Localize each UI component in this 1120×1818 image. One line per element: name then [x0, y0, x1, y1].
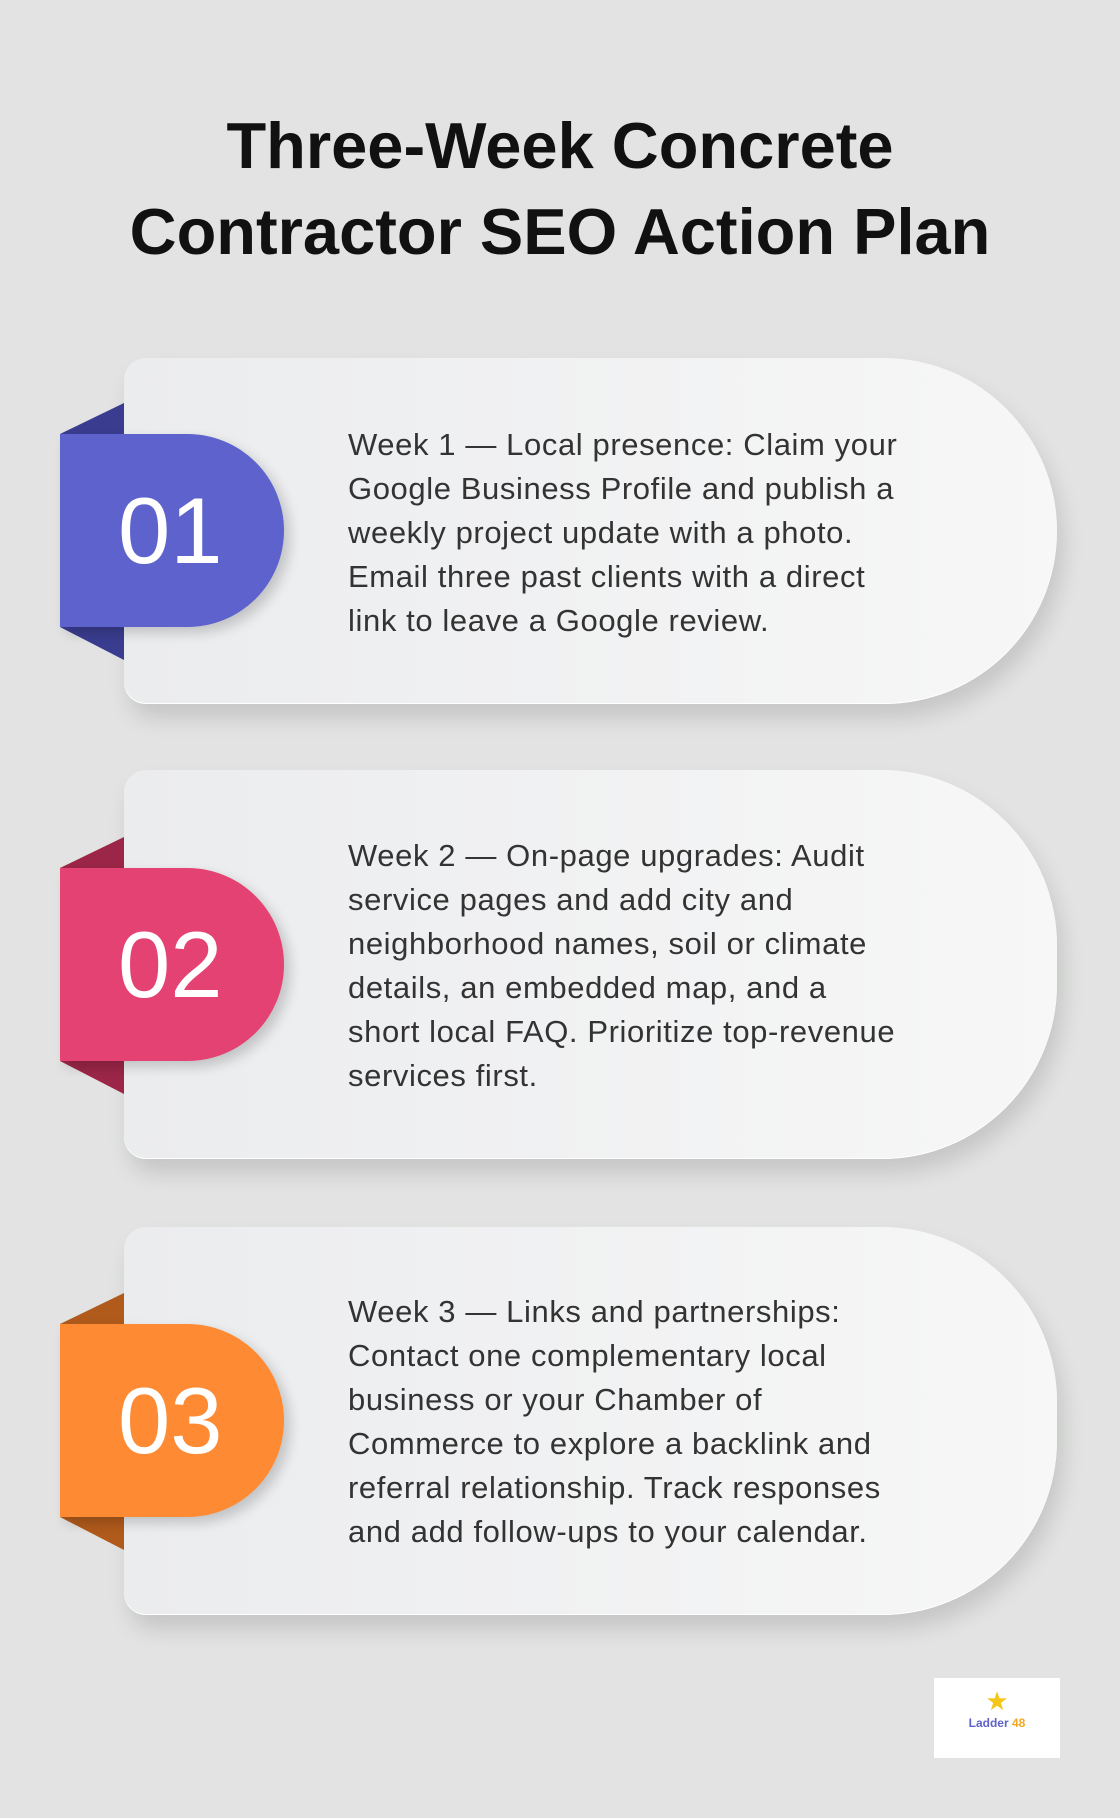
text week 3: Week 3 — Links and partnerships: [348, 1294, 840, 1329]
text week 3 [348, 1294, 881, 1549]
badge 02 [60, 868, 284, 1061]
badge 01 [60, 434, 284, 627]
title: Three-Week Concrete [226, 109, 894, 182]
fold 3 [60, 1293, 124, 1550]
text week 3: business or your Chamber of [348, 1382, 762, 1417]
text week 2: service pages and add city and [348, 882, 793, 917]
text week 1: link to leave a Google review. [348, 603, 769, 638]
badge 03 [60, 1324, 284, 1517]
text week 3: and add follow-ups to your calendar. [348, 1514, 868, 1549]
panel: week 1 [60, 358, 1068, 724]
badge 01: 01 [118, 478, 223, 583]
logo text: Ladder 48 [969, 1716, 1025, 1730]
text week 3: Commerce to explore a backlink and [348, 1426, 872, 1461]
fold 1 [60, 403, 124, 660]
text week 2: details, an embedded map, and a [348, 970, 827, 1005]
text week 2: Week 2 — On-page upgrades: Audit [348, 838, 865, 873]
card 3 [124, 1227, 1057, 1615]
icon: star: ★ [985, 1686, 1009, 1716]
text week 1: Google Business Profile and publish a [348, 471, 894, 506]
badge 03: 03 [118, 1368, 223, 1473]
text week 1 [348, 427, 897, 638]
title: Contractor SEO Action Plan [130, 195, 990, 268]
text week 2 [348, 838, 895, 1093]
text week 3: Contact one complementary local [348, 1338, 827, 1373]
text week 1: Week 1 — Local presence: Claim your [348, 427, 897, 462]
text week 1: Email three past clients with a direct [348, 559, 865, 594]
card 2 [124, 770, 1057, 1159]
badge 02: 02 [118, 912, 223, 1017]
title [130, 109, 990, 268]
fold 2 [60, 837, 124, 1094]
text week 2: services first. [348, 1058, 538, 1093]
panel: week 2 [60, 770, 1068, 1178]
logo [934, 1678, 1060, 1758]
card 1 [124, 358, 1057, 704]
text week 2: neighborhood names, soil or climate [348, 926, 867, 961]
text week 2: short local FAQ. Prioritize top-revenue [348, 1014, 895, 1049]
panel: week 3 [60, 1227, 1068, 1634]
text week 1: weekly project update with a photo. [348, 515, 853, 550]
text week 3: referral relationship. Track responses [348, 1470, 881, 1505]
